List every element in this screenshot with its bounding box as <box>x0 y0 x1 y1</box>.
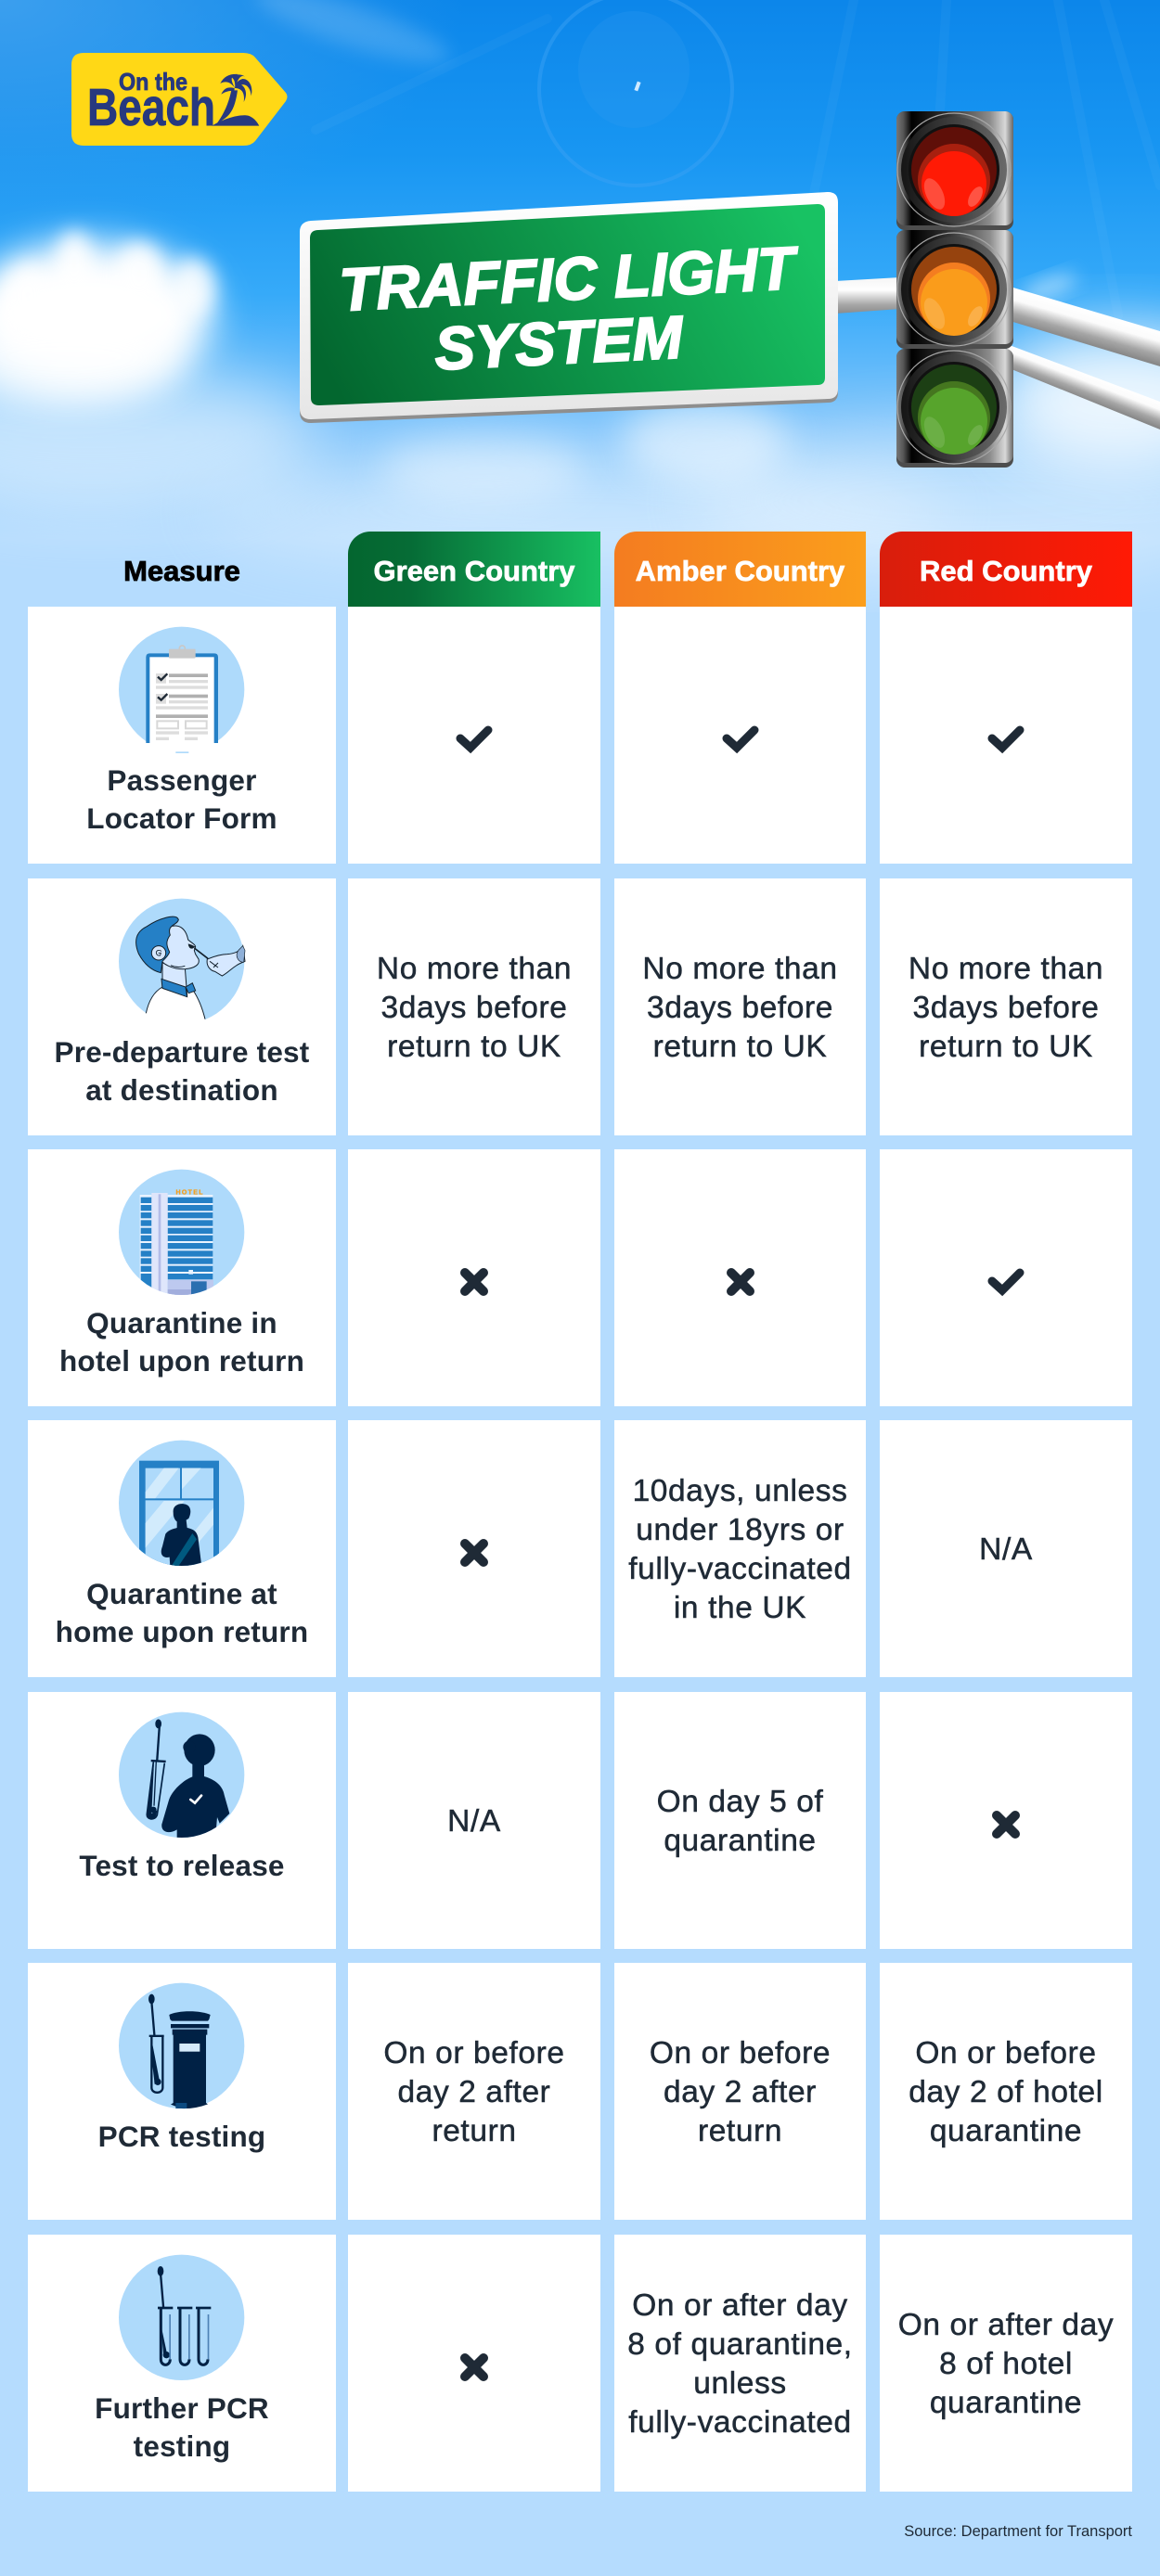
label: home upon return <box>56 1615 308 1648</box>
green: no <box>348 2235 600 2492</box>
green: yes <box>348 607 600 864</box>
icon: hotel building <box>119 1169 245 1295</box>
row: Quarantine in hotel upon return <box>28 1149 1132 1406</box>
row: PCR testing <box>28 1963 1132 2220</box>
amber value: On or before <box>650 2035 831 2070</box>
sign pole <box>835 277 900 314</box>
green value <box>348 878 600 1135</box>
label: PCR testing <box>98 2120 265 2153</box>
amber value: in the UK <box>674 1590 806 1625</box>
label: at destination <box>85 1073 278 1107</box>
icon: cross <box>727 1268 754 1296</box>
amber: no <box>614 1149 866 1406</box>
label <box>56 1577 308 1648</box>
icon: swab and person <box>119 1712 245 1838</box>
row: Test to release <box>28 1692 1132 1949</box>
icon: tick <box>987 1269 1025 1297</box>
green value: N/A <box>447 1803 501 1839</box>
red value: quarantine <box>930 2386 1082 2419</box>
red lamp <box>897 113 1011 226</box>
amber value <box>614 1963 866 2220</box>
green value: No more than <box>377 952 572 985</box>
clouds <box>0 231 1160 580</box>
icon: cross <box>992 1811 1020 1839</box>
green lamp <box>897 351 1011 464</box>
measure: Passenger Locator Form <box>28 607 336 864</box>
logo: On the Beach: Beach <box>87 78 215 137</box>
title: TRAFFIC LIGHT <box>338 234 801 324</box>
green value: return <box>432 2113 517 2148</box>
amber value: No more than <box>642 952 838 985</box>
measure: Further PCR testing <box>28 2235 336 2492</box>
label: Further PCR <box>95 2391 269 2425</box>
sky <box>0 0 1160 612</box>
amber value <box>614 2235 866 2492</box>
amber value <box>614 878 866 1135</box>
label: Quarantine in <box>86 1306 277 1339</box>
red value <box>880 1963 1132 2220</box>
amber value: quarantine <box>664 1824 817 1857</box>
measure: Test to release <box>28 1692 336 1949</box>
icon: cross <box>460 2353 488 2381</box>
row: Further PCR testing <box>28 2235 1132 2492</box>
column heading: Green Country <box>348 532 600 607</box>
green value: 3days before <box>381 991 567 1024</box>
red: yes <box>880 607 1132 864</box>
red: no <box>880 1692 1132 1949</box>
column heading: Amber Country: Amber Country <box>636 555 844 587</box>
amber value: fully-vaccinated <box>628 2404 852 2440</box>
red value: return to UK <box>919 1030 1093 1063</box>
red value: On or before <box>915 2035 1097 2070</box>
logo: On the Beach: On the <box>119 68 187 96</box>
amber value <box>614 1420 866 1677</box>
row: Pre-departure test at destination <box>28 878 1132 1135</box>
source note: Source: Department for Transport <box>904 2523 1132 2540</box>
amber value: 10days, unless <box>633 1473 847 1508</box>
road sign <box>300 192 838 423</box>
amber value: fully-vaccinated <box>628 1551 852 1586</box>
red value: On or after day <box>898 2308 1114 2341</box>
amber lamp <box>897 233 1011 346</box>
title <box>338 234 801 383</box>
column heading: Red Country: Red Country <box>920 555 1092 587</box>
green value: return to UK <box>387 1030 561 1063</box>
icon: man taking nasal swab <box>119 898 245 1019</box>
red value: day 2 of hotel <box>909 2074 1103 2109</box>
amber value: 3days before <box>647 991 833 1024</box>
column heading: Red Country <box>880 532 1132 607</box>
green: no <box>348 1420 600 1677</box>
red value <box>880 878 1132 1135</box>
red value: 8 of hotel <box>939 2347 1073 2380</box>
label: hotel upon return <box>59 1344 304 1378</box>
label <box>86 763 277 835</box>
traffic light <box>896 111 1013 468</box>
red value <box>880 1420 1132 1677</box>
icon: tick <box>722 725 759 753</box>
icon: tick <box>987 725 1025 753</box>
measure: Quarantine at home <box>28 1420 336 1677</box>
amber value: unless <box>693 2365 787 2401</box>
icon: cross <box>460 1268 488 1296</box>
measure: Quarantine in hotel <box>28 1149 336 1406</box>
amber value: On day 5 of <box>657 1785 823 1818</box>
hero: sky background with clouds, sign and traffic light <box>0 0 1160 592</box>
green: no <box>348 1149 600 1406</box>
icon: swab and three test tubes <box>119 2254 245 2380</box>
red value: quarantine <box>930 2113 1082 2148</box>
label <box>95 2391 269 2463</box>
label: testing <box>134 2429 230 2463</box>
icon: clipboard form <box>119 627 245 753</box>
amber value: 8 of quarantine, <box>627 2326 853 2362</box>
amber value: day 2 after <box>664 2074 817 2109</box>
label: Test to release <box>79 1849 285 1882</box>
amber value: return to UK <box>653 1030 827 1063</box>
label: Quarantine at <box>86 1577 277 1610</box>
amber value: return <box>698 2113 782 2148</box>
red value: N/A <box>979 1532 1033 1566</box>
amber value: On or after day <box>632 2288 848 2323</box>
amber value <box>614 1692 866 1949</box>
label: Passenger <box>107 763 257 797</box>
column heading: Amber Country <box>614 532 866 607</box>
amber: yes <box>614 607 866 864</box>
logo: On the Beach <box>71 53 288 146</box>
icon: swab and post box <box>119 1983 245 2109</box>
sun flare <box>250 0 1160 315</box>
label <box>55 1035 309 1107</box>
icon: hotel building: HOTEL <box>175 1190 204 1197</box>
icon: cross <box>460 1539 488 1567</box>
measure: PCR testing <box>28 1963 336 2220</box>
red value <box>880 2235 1132 2492</box>
green value <box>348 1963 600 2220</box>
amber value: under 18yrs or <box>636 1512 844 1547</box>
label <box>59 1306 304 1378</box>
red: yes <box>880 1149 1132 1406</box>
right pole upper <box>1007 286 1160 366</box>
red value: 3days before <box>913 991 1099 1024</box>
icon: tick <box>457 725 492 753</box>
red value: No more than <box>909 952 1103 985</box>
icon: person at window <box>119 1440 245 1566</box>
column heading: Measure: Measure <box>123 555 240 587</box>
label: Locator Form <box>86 801 277 835</box>
green value <box>348 1692 600 1949</box>
green value: On or before <box>383 2035 565 2070</box>
row: Passenger Locator Form <box>28 607 1132 864</box>
row: Quarantine at home upon return <box>28 1420 1132 1677</box>
measure: Pre-departure test <box>28 878 336 1135</box>
column heading: Green Country: Green Country <box>373 555 575 587</box>
title: SYSTEM <box>433 302 686 383</box>
right pole lower <box>1007 344 1160 429</box>
label: Pre-departure test <box>55 1035 309 1069</box>
green value: day 2 after <box>398 2074 550 2109</box>
